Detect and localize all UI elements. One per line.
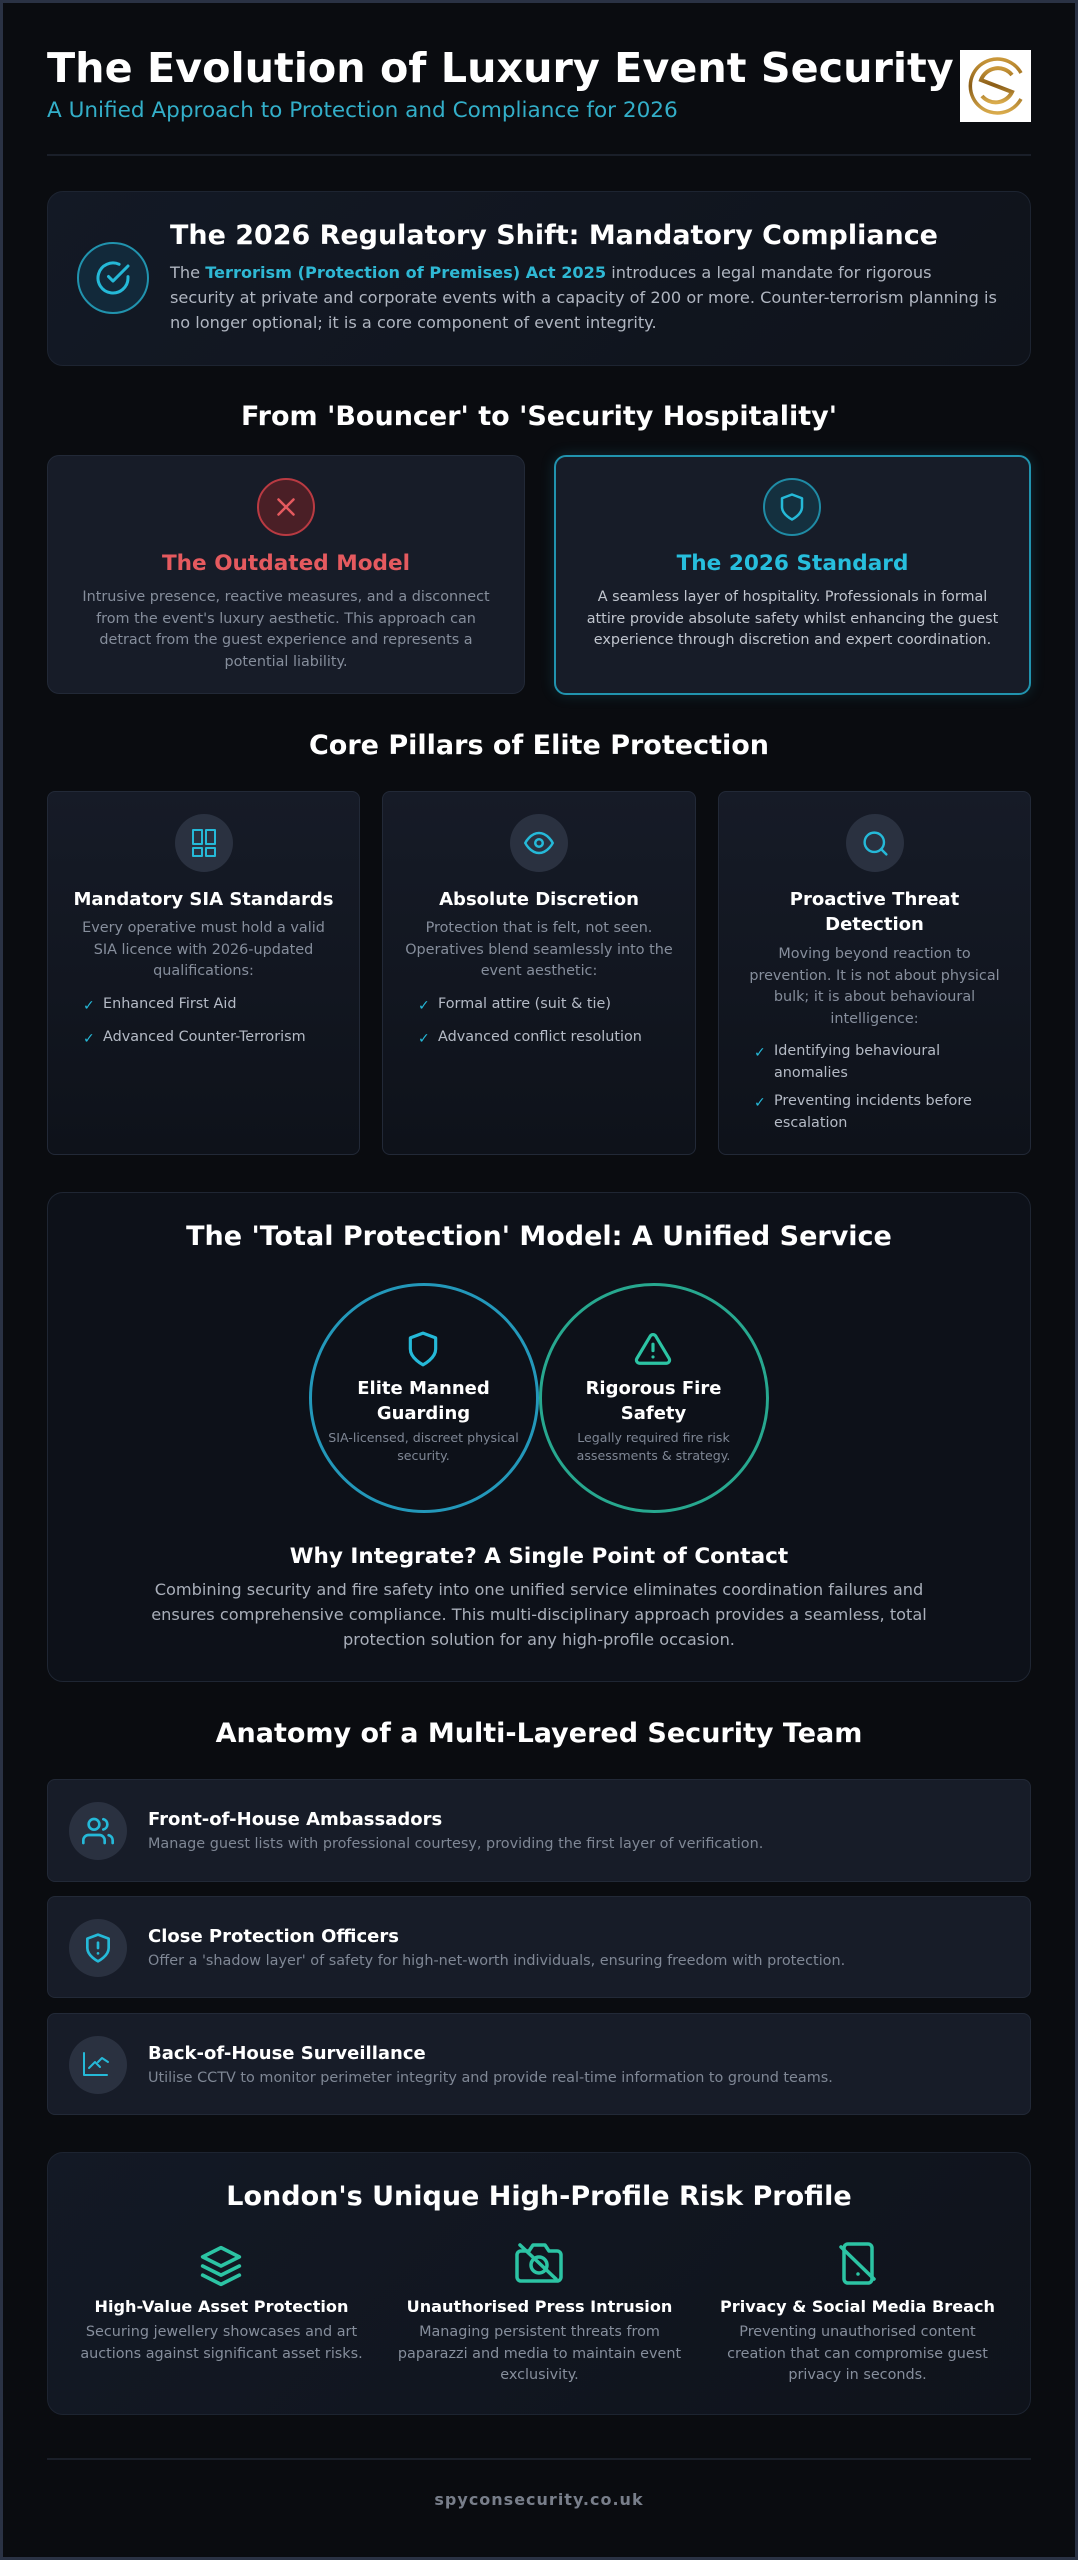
- body text: [151, 1580, 927, 1649]
- text: from the event's luxury aesthetic. This approach can: [96, 610, 476, 626]
- heading: Proactive Threat: [790, 889, 959, 910]
- checklist: Formal attire (suit & tie): [438, 996, 611, 1012]
- text: experience through discretion and expert coordination.: [594, 632, 991, 648]
- text: Preventing unauthorised content: [739, 2324, 976, 2340]
- body text: no longer optional; it is a core component of event integrity.: [170, 313, 657, 332]
- title: Back-of-House Surveillance: [148, 2043, 426, 2064]
- heading: The 'Total Protection' Model: A Unified Service: [186, 1221, 892, 1252]
- description: Manage guest lists with professional courtesy, providing the first layer of verification.: [148, 1836, 763, 1852]
- panel: SIA standards: [47, 791, 360, 1155]
- icon: layers: [200, 2246, 242, 2286]
- checklist: Preventing incidents before: [774, 1093, 972, 1109]
- icon: shield alert: [69, 1919, 127, 1977]
- checklist: [83, 996, 306, 1047]
- title: The Evolution of Luxury Event Security: [47, 44, 954, 92]
- icon: users: [69, 1802, 127, 1860]
- title: Front-of-House Ambassadors: [148, 1809, 442, 1830]
- icon: eye: [510, 814, 568, 872]
- checklist: ✓: [83, 998, 95, 1014]
- text: auctions against significant asset risks.: [80, 2346, 363, 2362]
- text: attire provide absolute safety whilst enhancing the guest: [587, 610, 998, 626]
- subtitle: A Unified Approach to Protection and Compliance for 2026: [47, 98, 678, 123]
- checklist: ✓: [83, 1031, 95, 1047]
- title: Unauthorised Press Intrusion: [407, 2297, 672, 2316]
- panel: total protection: [47, 1192, 1031, 1682]
- heading: Absolute Discretion: [439, 889, 639, 910]
- item: social media breach: [720, 2242, 995, 2383]
- checklist: ✓: [754, 1095, 766, 1111]
- text: exclusivity.: [500, 2367, 579, 2383]
- text: Intrusive presence, reactive measures, and a disconnect: [82, 589, 490, 605]
- icon: shield: [408, 1332, 438, 1366]
- text: SIA licence with 2026-updated: [94, 942, 313, 958]
- text: detract from the guest experience and represents a: [99, 632, 473, 648]
- text: Operatives blend seamlessly into the: [405, 942, 673, 958]
- title: Privacy & Social Media Breach: [720, 2297, 995, 2316]
- body text: Combining security and fire safety into one unified service eliminates coordination failures and: [155, 1580, 923, 1599]
- title: Close Protection Officers: [148, 1926, 399, 1947]
- heading: Detection: [825, 914, 924, 935]
- heading: London's Unique High-Profile Risk Profile: [226, 2181, 852, 2212]
- heading: Mandatory SIA Standards: [73, 889, 334, 910]
- text: [727, 2324, 988, 2383]
- checklist: anomalies: [774, 1064, 848, 1080]
- heading: anatomy: Anatomy of a Multi-Layered Security Team: [216, 1718, 862, 1749]
- body text: security at private and corporate events with a capacity of 200 or more. Counter-terrorism planning is: [170, 288, 997, 307]
- text: potential liability.: [224, 654, 348, 670]
- text: paparazzi and media to maintain event: [398, 2346, 681, 2362]
- icon: phone off: [839, 2242, 876, 2285]
- title: High-Value Asset Protection: [95, 2297, 348, 2316]
- heading: pillars: Core Pillars of Elite Protection: [309, 730, 769, 761]
- description: SIA-licensed, discreet physical: [328, 1430, 519, 1444]
- icon: grid: [175, 814, 233, 872]
- description: assessments & strategy.: [577, 1448, 730, 1462]
- row: close protection: [47, 1896, 1031, 1998]
- text: Securing jewellery showcases and art: [86, 2324, 357, 2340]
- logo: [960, 50, 1031, 122]
- text: [587, 589, 998, 648]
- checklist: [418, 996, 642, 1047]
- label: Safety: [621, 1403, 686, 1424]
- icon: camera off: [515, 2243, 563, 2283]
- text: [398, 2324, 681, 2383]
- label: Guarding: [377, 1403, 470, 1424]
- text: creation that can compromise guest: [727, 2346, 988, 2362]
- text: Every operative must hold a valid: [82, 920, 325, 936]
- icon: x: [257, 478, 315, 536]
- body text: [170, 263, 997, 332]
- text: event aesthetic:: [481, 963, 597, 979]
- description: security.: [397, 1448, 450, 1462]
- text: A seamless layer of hospitality. Professionals in formal: [598, 589, 987, 605]
- panel: discretion: [382, 791, 696, 1155]
- text: privacy in seconds.: [788, 2367, 927, 2383]
- text: [82, 920, 325, 979]
- panel: regulatory shift: [47, 191, 1031, 366]
- icon: check circle: [77, 242, 149, 314]
- description: Legally required fire risk: [577, 1430, 730, 1444]
- description: Utilise CCTV to monitor perimeter integrity and provide real-time information to ground teams.: [148, 2070, 833, 2086]
- text: prevention. It is not about physical: [749, 968, 1000, 984]
- label: Rigorous Fire: [586, 1378, 721, 1399]
- body text: protection solution for any high-profile occasion.: [343, 1630, 735, 1649]
- footer: spyconsecurity.co.uk: [434, 2490, 644, 2509]
- body text: The Terrorism (Protection of Premises) Act 2025 introduces a legal mandate for rigorous: [170, 263, 932, 282]
- description: [328, 1430, 519, 1462]
- text: Managing persistent threats from: [419, 2324, 660, 2340]
- panel: 2026 standard: [554, 455, 1031, 695]
- text: [405, 920, 673, 979]
- panel: outdated model: [47, 455, 525, 694]
- description: Offer a 'shadow layer' of safety for high-net-worth individuals, ensuring freedom with protection.: [148, 1952, 845, 1968]
- text: Moving beyond reaction to: [778, 946, 971, 962]
- body text: ensures comprehensive compliance. This multi-disciplinary approach provides a seamless, total: [151, 1605, 927, 1624]
- checklist: Advanced Counter-Terrorism: [103, 1029, 306, 1045]
- label: [357, 1378, 490, 1424]
- item: press intrusion: [398, 2243, 681, 2383]
- row: front of house: [47, 1779, 1031, 1882]
- heading: [790, 889, 959, 935]
- text: [749, 946, 1000, 1026]
- text: bulk; it is about behavioural: [774, 989, 975, 1005]
- label: Elite Manned: [357, 1378, 490, 1399]
- checklist: ✓: [418, 1031, 430, 1047]
- circle: fire safety: [539, 1283, 769, 1513]
- checklist: escalation: [774, 1114, 847, 1130]
- panel: threat detection: [718, 791, 1031, 1155]
- checklist: Advanced conflict resolution: [438, 1029, 642, 1045]
- checklist: [754, 1043, 972, 1130]
- icon: shield: [763, 478, 821, 536]
- item: asset protection: [80, 2246, 363, 2362]
- checklist: Identifying behavioural: [774, 1043, 940, 1059]
- circle: manned guarding: [309, 1283, 539, 1513]
- text: intelligence:: [830, 1010, 919, 1026]
- icon: chart: [69, 2036, 127, 2094]
- heading: The 2026 Standard: [677, 551, 908, 576]
- heading: The 2026 Regulatory Shift: Mandatory Compliance: [170, 220, 938, 251]
- icon: search: [846, 814, 904, 872]
- panel: london risk: [47, 2152, 1031, 2415]
- label: [586, 1378, 721, 1424]
- icon: warning: [634, 1333, 672, 1365]
- checklist: ✓: [754, 1045, 766, 1061]
- text: Protection that is felt, not seen.: [426, 920, 652, 936]
- heading: bouncer: From 'Bouncer' to 'Security Hospitality': [241, 401, 837, 432]
- text: [80, 2324, 363, 2362]
- text: [82, 589, 490, 670]
- description: [577, 1430, 730, 1462]
- heading: The Outdated Model: [162, 551, 410, 576]
- checklist: ✓: [418, 998, 430, 1014]
- text: qualifications:: [153, 963, 254, 979]
- checklist: Enhanced First Aid: [103, 996, 236, 1012]
- subheading: Why Integrate? A Single Point of Contact: [290, 1544, 788, 1569]
- row: back of house: [47, 2013, 1031, 2115]
